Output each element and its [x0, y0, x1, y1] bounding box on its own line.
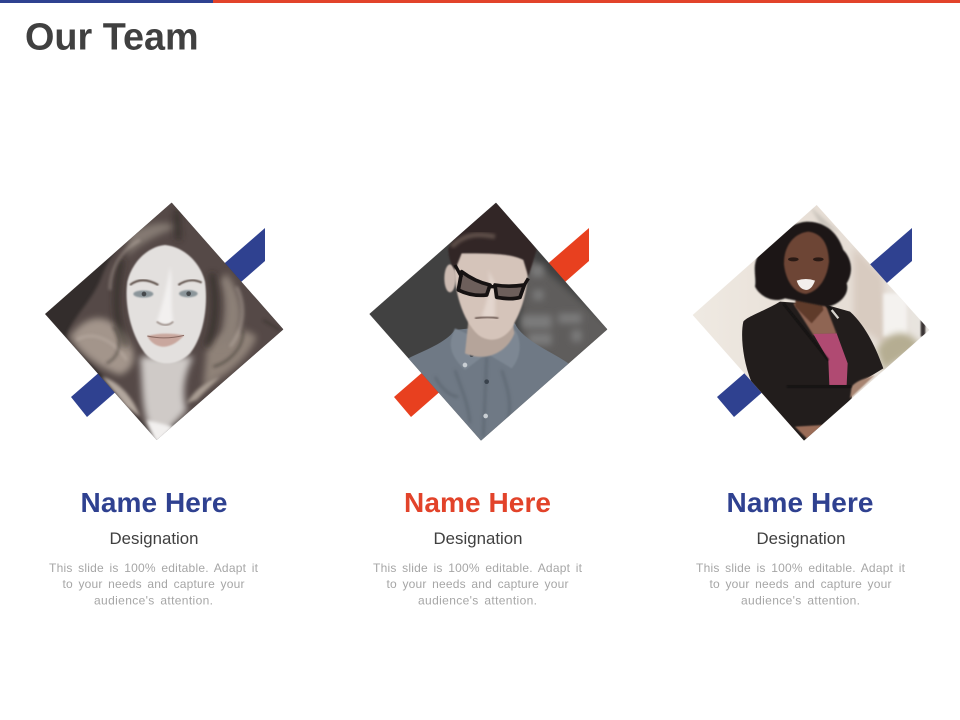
description 1: to your needs and capture your [62, 577, 244, 591]
top bar [0, 0, 960, 3]
description 3: to your needs and capture your [710, 577, 892, 591]
name 2: Name Here [404, 487, 551, 518]
name 1: Name Here [80, 487, 228, 518]
portrait 1 [45, 202, 284, 440]
designation 2: Designation [434, 529, 522, 548]
description 1: This slide is 100% editable. Adapt it [49, 561, 259, 575]
description 2: This slide is 100% editable. Adapt it [373, 561, 583, 575]
accent strip 3 [717, 228, 912, 417]
designation 1: Designation [110, 529, 198, 548]
accent strip 1 [71, 228, 265, 417]
description 2: audience's attention. [418, 594, 537, 608]
description 1: audience's attention. [94, 594, 213, 608]
designation 3: Designation [756, 529, 846, 548]
chest and top [793, 303, 848, 385]
team member 3 [693, 205, 929, 604]
name 3: Name Here [726, 487, 874, 518]
accent strip 2 [394, 228, 589, 417]
portrait 2 [370, 202, 608, 440]
description 2: to your needs and capture your [386, 577, 568, 591]
description 3: audience's attention. [741, 594, 860, 608]
team member 1 [45, 202, 284, 604]
team member 2 [370, 202, 608, 604]
jacket [742, 302, 883, 443]
portrait 3 [693, 205, 929, 440]
title: Our Team [25, 16, 199, 58]
description 3: This slide is 100% editable. Adapt it [696, 561, 906, 575]
